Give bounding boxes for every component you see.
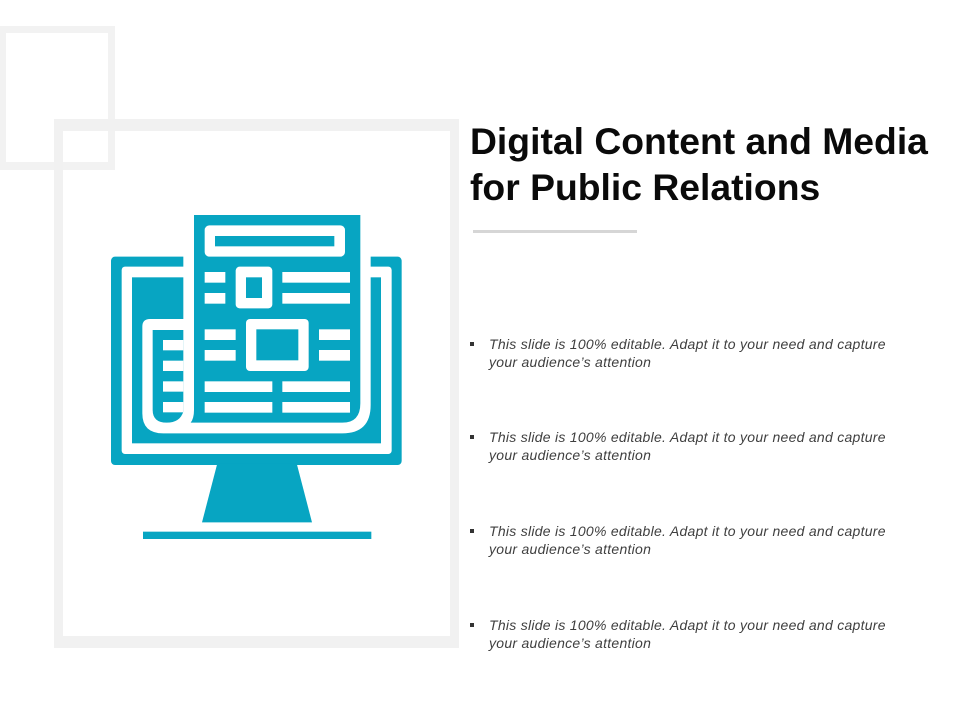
bullet 2: your audience’s attention [489,447,651,463]
bullet 4: This slide is 100% editable. Adapt it to your need and capture [489,617,886,633]
bullet 1 [470,336,886,370]
decorative frame: large panel [54,119,459,648]
bullet 1: your audience’s attention [489,354,651,370]
monitor base [143,532,371,539]
large photo [246,319,309,371]
title underline [473,230,637,233]
monitor stand [202,463,312,522]
small photo [236,267,272,308]
title: for Public Relations [470,166,820,208]
bullet 3 [470,523,886,557]
monitor body [111,257,402,465]
bullet 1: This slide is 100% editable. Adapt it to your need and capture [489,336,886,352]
bullet 2: This slide is 100% editable. Adapt it to your need and capture [489,429,886,445]
bullet 2 [470,429,886,463]
text lines [163,272,350,413]
bullet 4 [470,617,886,651]
newspaper [142,215,371,433]
title [470,120,928,208]
bullet 3: This slide is 100% editable. Adapt it to your need and capture [489,523,886,539]
decorative frame: small square [0,26,115,170]
bullet 3: your audience’s attention [489,541,651,557]
masthead [205,225,345,257]
bullet 4: your audience’s attention [489,635,651,651]
title: Digital Content and Media [470,120,928,162]
